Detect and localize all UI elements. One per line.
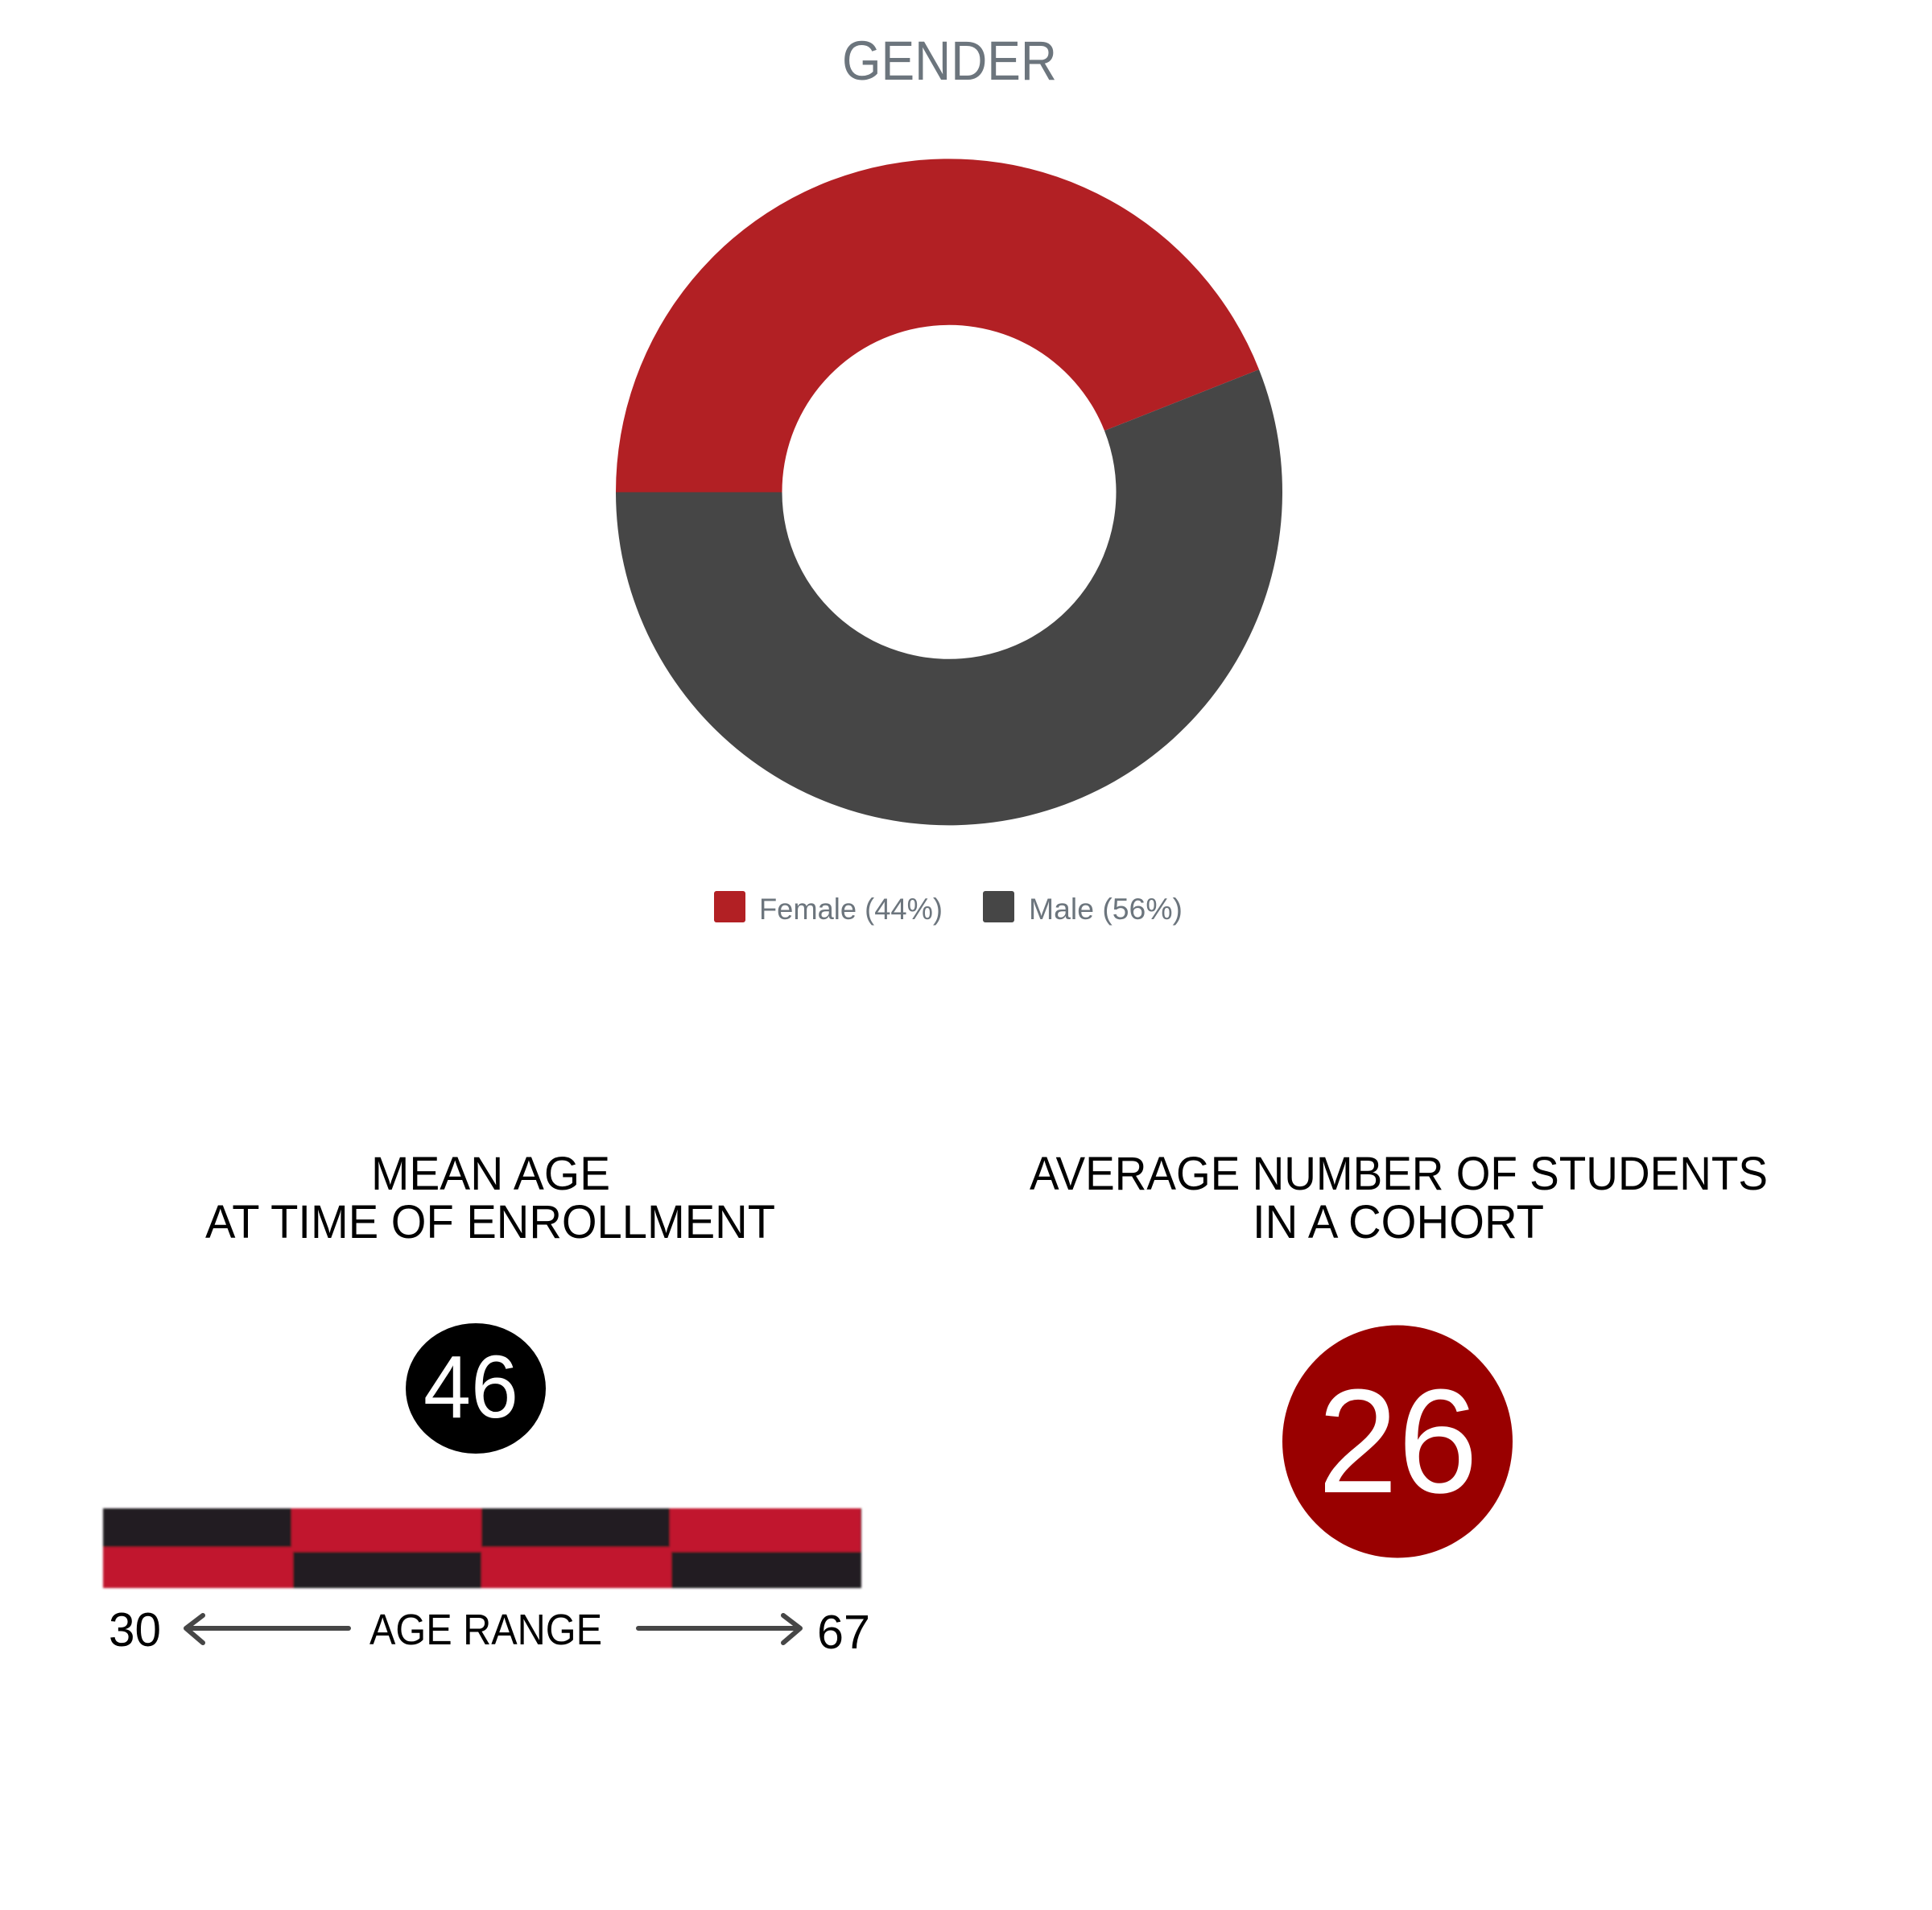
- arrow: left: [186, 1615, 349, 1643]
- heading: average number of students: [1030, 1148, 1768, 1248]
- badge: mean age 46: [406, 1323, 546, 1454]
- label: maximum age 67: 67: [817, 1606, 870, 1659]
- badge: average cohort 26: [1282, 1325, 1513, 1558]
- heading: mean age: MEAN AGE: [371, 1148, 610, 1200]
- age range bar: [103, 1508, 861, 1588]
- legend label: female: Female (44%): [759, 893, 943, 926]
- label: minimum age 30: 30: [109, 1603, 161, 1656]
- legend swatch: female: [714, 891, 745, 922]
- panel: cohort size: [1030, 1148, 1768, 1558]
- segment: male 56%: [616, 369, 1282, 825]
- heading: mean age: [205, 1148, 775, 1248]
- heading: average number of students: IN A COHORT: [1253, 1196, 1544, 1248]
- legend swatch: male: [983, 891, 1014, 922]
- label: age range: AGE RANGE: [369, 1606, 602, 1654]
- heading: gender: GENDER: [842, 30, 1057, 92]
- badge: average cohort 26: 26: [1318, 1358, 1478, 1524]
- legend: [714, 891, 1183, 926]
- panel: mean age: [103, 1148, 870, 1659]
- segment: female 44%: [616, 159, 1259, 492]
- heading: average number of students: AVERAGE NUMBER OF STUDENTS: [1030, 1148, 1768, 1200]
- badge: mean age 46: 46: [423, 1338, 518, 1437]
- arrow: right: [638, 1615, 800, 1643]
- heading: mean age: AT TIME OF ENROLLMENT: [205, 1196, 775, 1248]
- legend label: male: Male (56%): [1029, 893, 1183, 926]
- donut chart: gender split: [616, 159, 1282, 825]
- panel: gender: [616, 30, 1282, 926]
